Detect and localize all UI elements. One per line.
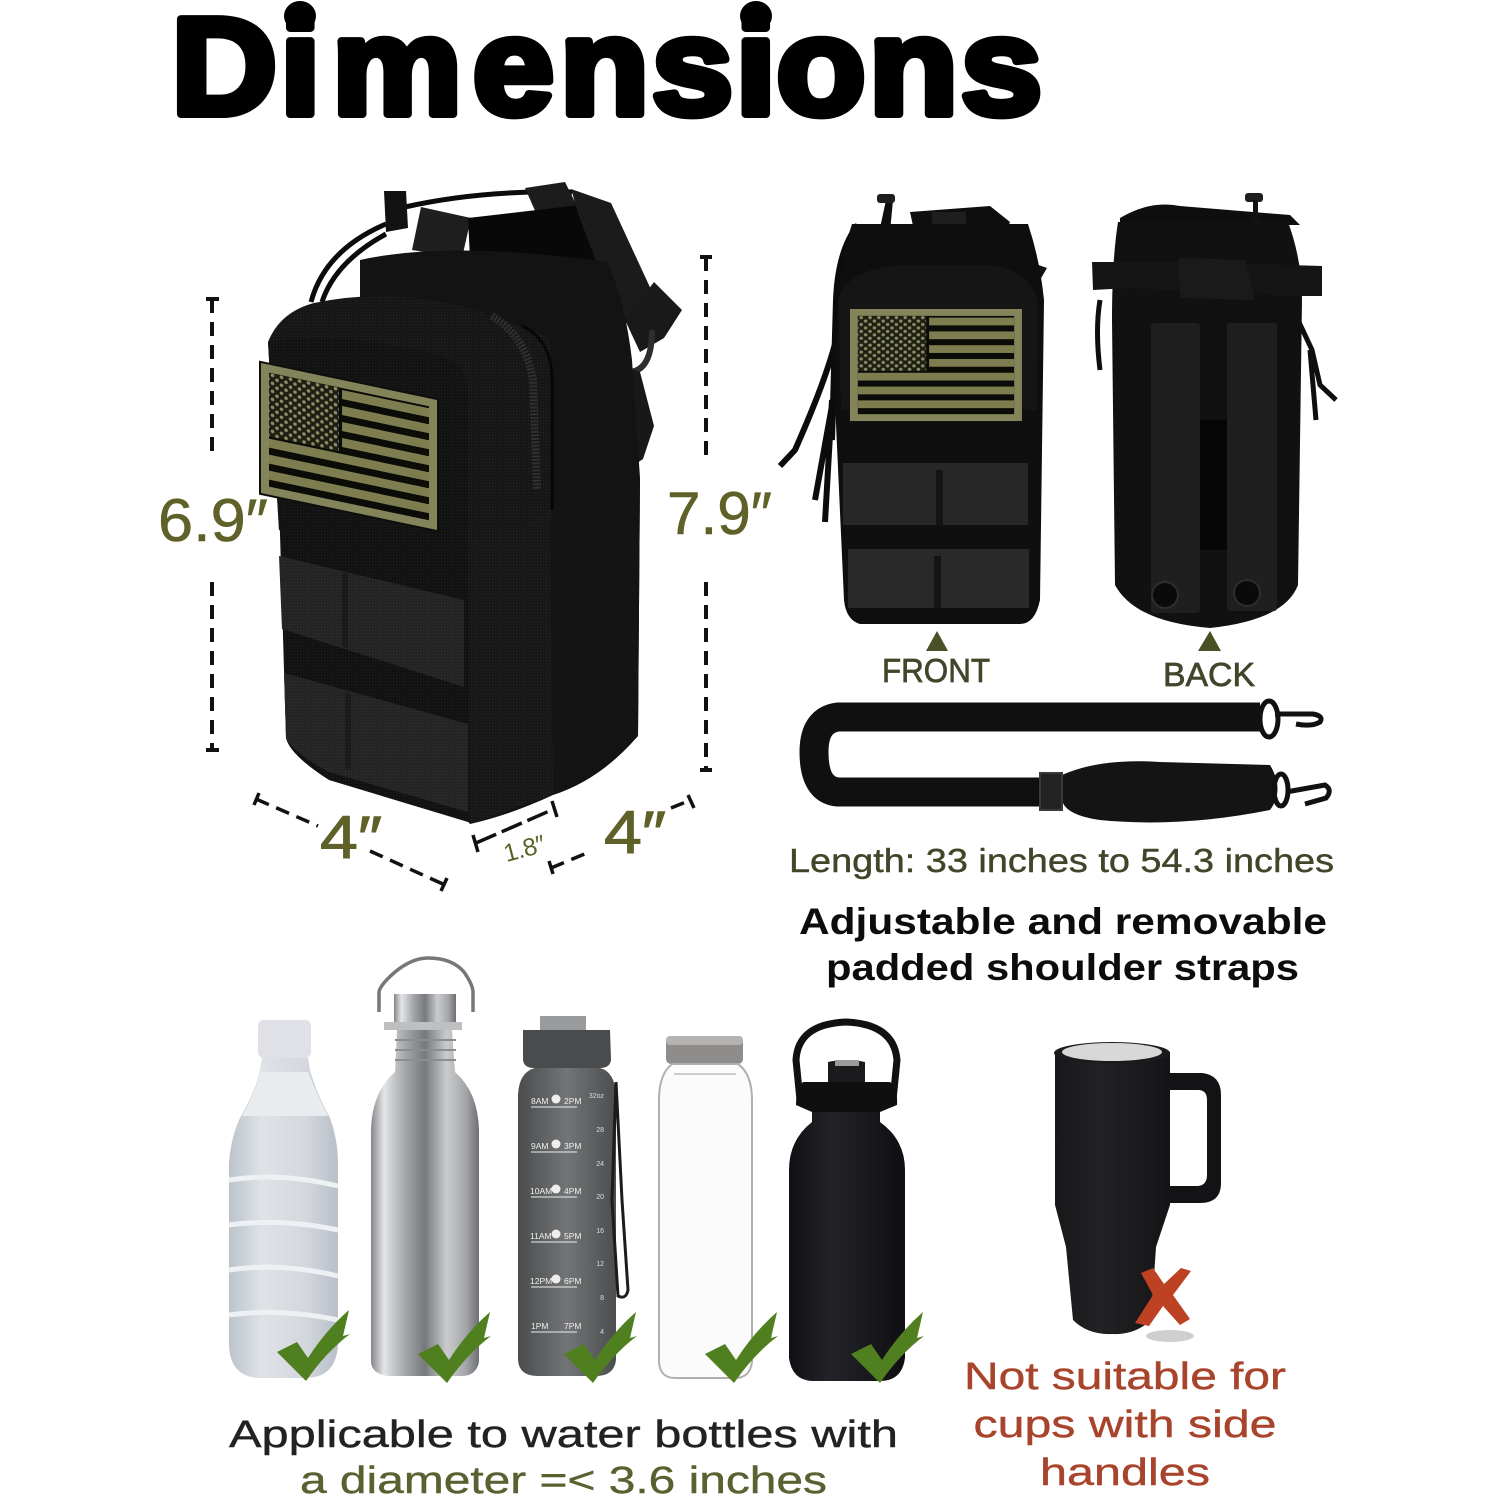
bottle: gray motivational: 20 (596, 1194, 604, 1201)
caption: applicable bottles (229, 1414, 898, 1497)
front view bag (780, 194, 1047, 624)
strap heading (799, 901, 1327, 988)
caption: not suitable: Not suitable for (964, 1356, 1286, 1398)
label: 4 inches left: 4″ (320, 804, 382, 871)
top cords and handle (311, 192, 572, 302)
dimension: depth 1.8 (473, 801, 557, 852)
bottle: gray motivational: 12 (596, 1261, 604, 1268)
clips (1260, 701, 1329, 806)
time markers: 4PM (564, 1186, 581, 1196)
strap length text: Length: 33 inches to 54.3 inches (789, 842, 1334, 879)
fabric texture (268, 296, 553, 824)
time markers: 12PM (530, 1276, 552, 1286)
bottle: gray motivational: 24 (596, 1161, 604, 1168)
time markers: 5PM (564, 1231, 581, 1241)
shoulder strap (814, 701, 1329, 822)
strap buckle (1040, 773, 1062, 810)
dimension: left height (206, 299, 219, 750)
time markers: 2PM (564, 1096, 581, 1106)
strap heading: padded shoulder straps (826, 947, 1299, 988)
flag patch (850, 309, 1022, 421)
label: 6.9 inches: 6.9″ (158, 487, 268, 554)
bottle: gray motivational: 4 (600, 1329, 604, 1336)
arrow: back (1198, 631, 1221, 651)
side cords (1098, 300, 1336, 420)
time markers (530, 1096, 581, 1332)
time markers: 1PM (531, 1321, 548, 1331)
label: 1.8 inches: 1.8″ (501, 830, 549, 868)
left cords (780, 225, 858, 522)
top webbing loops (412, 207, 471, 258)
arrow: front (926, 631, 948, 651)
time markers: 11AM (530, 1231, 552, 1241)
caption: not suitable (964, 1356, 1286, 1494)
green check marks (277, 1310, 924, 1383)
bottle: stainless steel (371, 958, 479, 1376)
bottle: glass (659, 1036, 752, 1378)
bottle: plastic water (229, 1020, 338, 1378)
bottle: gray motivational: 16 (596, 1228, 604, 1235)
caption: not suitable: handles (1040, 1452, 1210, 1494)
webbing (843, 463, 1028, 525)
side tab and D-ring (625, 282, 682, 352)
body (1112, 222, 1302, 628)
side strap (604, 362, 654, 486)
time markers: 8AM (531, 1096, 548, 1106)
red X (1135, 1268, 1191, 1326)
vertical straps (1151, 323, 1200, 613)
back view bag (1092, 193, 1336, 628)
label: 4 inches right: 4″ (604, 799, 666, 866)
time markers: 10AM (530, 1186, 552, 1196)
bottle: gray motivational: 28 (596, 1127, 604, 1134)
body (834, 224, 1044, 624)
dimension: right height (700, 257, 712, 770)
flag patch (259, 361, 439, 532)
bottle: gray motivational (518, 1016, 628, 1376)
label: back: BACK (1163, 656, 1255, 693)
webbing rows (279, 556, 464, 687)
caption: applicable bottles: Applicable to water bottles with (229, 1414, 898, 1456)
strap heading: Adjustable and removable (799, 901, 1327, 942)
top hardware (880, 200, 1010, 235)
lower front (279, 500, 468, 822)
tumbler with side handle (1054, 1042, 1221, 1342)
main bag photo (259, 182, 682, 824)
dimension: width right (549, 795, 694, 874)
time markers: 3PM (564, 1141, 581, 1151)
label: front: FRONT (882, 652, 990, 689)
time markers: 6PM (564, 1276, 581, 1286)
handle strap (1092, 262, 1322, 296)
bottle: gray motivational: 8 (600, 1295, 604, 1302)
dimension: width left (254, 793, 447, 891)
bottle: gray motivational: 32oz (589, 1093, 604, 1100)
time markers: 7PM (564, 1321, 581, 1331)
pocket (268, 296, 553, 558)
caption: not suitable: cups with side (974, 1404, 1276, 1446)
snap buttons (1152, 582, 1178, 608)
bottle: black with handle (789, 1022, 905, 1381)
label: 7.9 inches: 7.9″ (667, 480, 772, 547)
zipper (492, 316, 537, 490)
rear body (360, 250, 640, 824)
time markers: 9AM (531, 1141, 548, 1151)
